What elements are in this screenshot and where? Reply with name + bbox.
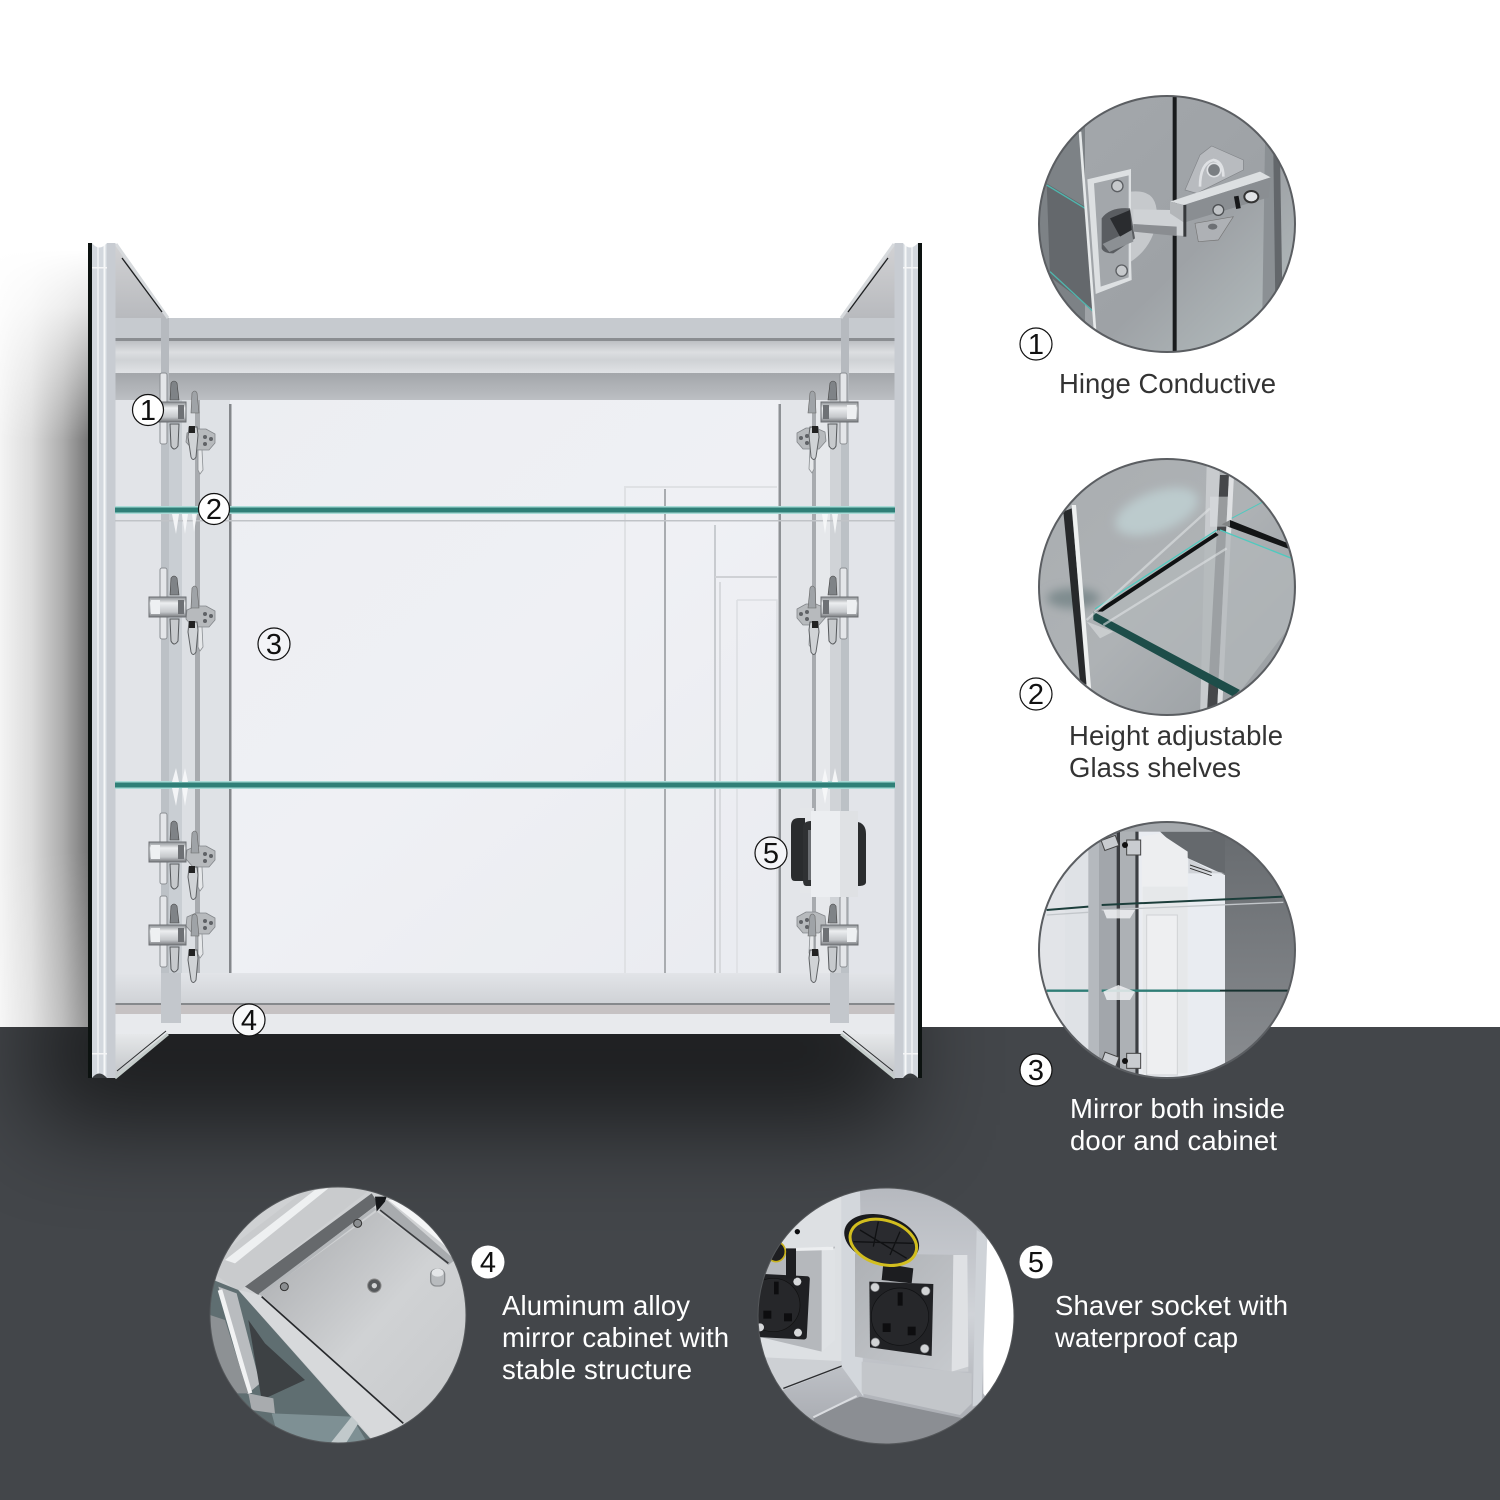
marker 5 for socket caption: [1020, 1246, 1052, 1279]
detail circle 5: shaver socket: [758, 1188, 1014, 1444]
left door: [88, 243, 168, 1078]
number marker 5 on cabinet: [755, 837, 787, 870]
caption: hinge conductive: Hinge Conductive: [1059, 368, 1276, 399]
marker 2 for shelf caption: 2: [1028, 679, 1044, 711]
caption: mirror both inside: door and cabinet: [1070, 1125, 1277, 1156]
detail circle 4: aluminum structure: [205, 1180, 475, 1450]
caption: shaver socket: Shaver socket with: [1055, 1290, 1288, 1321]
bottom frame: [115, 973, 895, 1034]
glass shelf upper: [115, 506, 895, 534]
caption: aluminum alloy: [502, 1290, 729, 1385]
number marker 2 on cabinet: 2: [206, 494, 222, 526]
caption: aluminum alloy: mirror cabinet with: [502, 1322, 729, 1353]
caption: aluminum alloy: stable structure: [502, 1354, 692, 1385]
background: dark floor band: [0, 1027, 1500, 1500]
caption: height adjustable glass shelves: Height adjustable: [1069, 720, 1283, 751]
caption: aluminum alloy: Aluminum alloy: [502, 1290, 690, 1321]
marker 4 for structure caption: [472, 1246, 504, 1279]
cabinet drop shadow: [0, 250, 900, 1125]
number marker 2 on cabinet: [198, 494, 230, 526]
caption: height adjustable glass shelves: Glass shelves: [1069, 752, 1241, 783]
caption: mirror both inside: [1070, 1093, 1285, 1156]
number marker 3 on cabinet: 3: [266, 629, 282, 661]
detail circle 2: glass shelf: [1030, 455, 1300, 725]
right side panel: [778, 318, 895, 1034]
caption: mirror both inside: Mirror both inside: [1070, 1093, 1285, 1124]
detail circle 3: mirrors: [1030, 815, 1302, 1085]
left hinges: [149, 373, 215, 982]
mirror cabinet illustration: [88, 243, 922, 1078]
reflected door in back mirror: [625, 487, 777, 973]
marker 2 for shelf caption: [1020, 678, 1052, 711]
marker 1 for hinge caption: [1020, 328, 1052, 361]
background: white wall: [0, 0, 1500, 1028]
marker 4 for structure caption: 4: [480, 1247, 496, 1279]
number marker 1 on cabinet: 1: [140, 395, 156, 427]
detail circle 1: hinge: [1030, 90, 1300, 360]
shaver socket: [791, 808, 866, 897]
marker 5 for socket caption: 5: [1028, 1247, 1044, 1279]
right hinges: [797, 373, 858, 982]
number marker 1 on cabinet: [132, 394, 164, 427]
marker 3 for mirror caption: [1020, 1054, 1052, 1087]
caption: shaver socket: waterproof cap: [1054, 1322, 1238, 1353]
caption: height adjustable glass shelves: [1069, 720, 1283, 783]
top frame: [115, 318, 895, 400]
glass shelf lower: [115, 768, 895, 806]
cabinet back mirror: [168, 400, 840, 975]
number marker 3 on cabinet: [258, 628, 290, 661]
right door: [841, 243, 922, 1078]
number marker 4 on cabinet: 4: [241, 1005, 257, 1037]
hinge plate on left door: [1087, 169, 1157, 294]
number marker 5 on cabinet: 5: [763, 838, 779, 870]
number marker 4 on cabinet: [233, 1004, 265, 1037]
marker 1 for hinge caption: 1: [1028, 329, 1044, 361]
marker 3 for mirror caption: 3: [1028, 1055, 1044, 1087]
left side panel: [115, 318, 232, 1034]
caption: shaver socket: [1054, 1290, 1288, 1353]
